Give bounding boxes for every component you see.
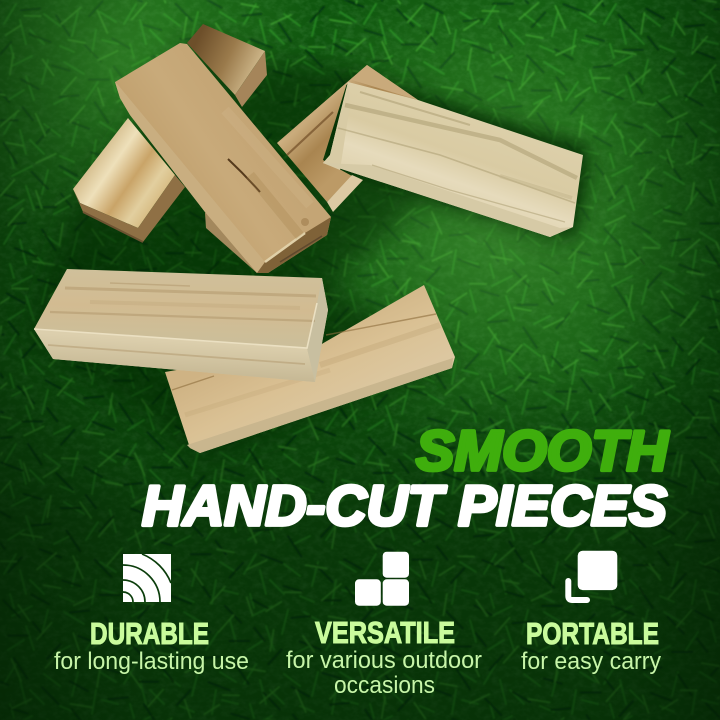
feature: portable xyxy=(521,551,661,675)
label: durable: DURABLE xyxy=(90,616,209,651)
label: portable: PORTABLE xyxy=(526,616,659,651)
icon: portable squares xyxy=(568,551,617,600)
label: versatile: VERSATILE xyxy=(315,615,455,650)
wooden block: center xyxy=(115,43,331,273)
caption: portable: for easy carry xyxy=(521,648,661,675)
wooden block: back right xyxy=(205,65,418,273)
title line: smooth: SMOOTH xyxy=(416,419,670,483)
icon: durable arcs xyxy=(123,554,171,602)
block shadows xyxy=(30,40,590,460)
wooden block: lower left xyxy=(34,269,328,382)
caption: versatile: occasions xyxy=(334,672,435,699)
caption: versatile: for various outdoor xyxy=(286,647,482,674)
icon: stacked blocks xyxy=(355,552,409,606)
feature: durable xyxy=(54,554,249,675)
wooden block: back left xyxy=(73,24,267,242)
caption: durable: for long-lasting use xyxy=(54,648,249,675)
title line: hand-cut pieces: HAND-CUT PIECES xyxy=(142,474,667,538)
feature: versatile xyxy=(286,552,482,699)
wooden block: bottom xyxy=(165,285,455,453)
title xyxy=(142,419,670,538)
wooden block: top right xyxy=(323,82,583,237)
